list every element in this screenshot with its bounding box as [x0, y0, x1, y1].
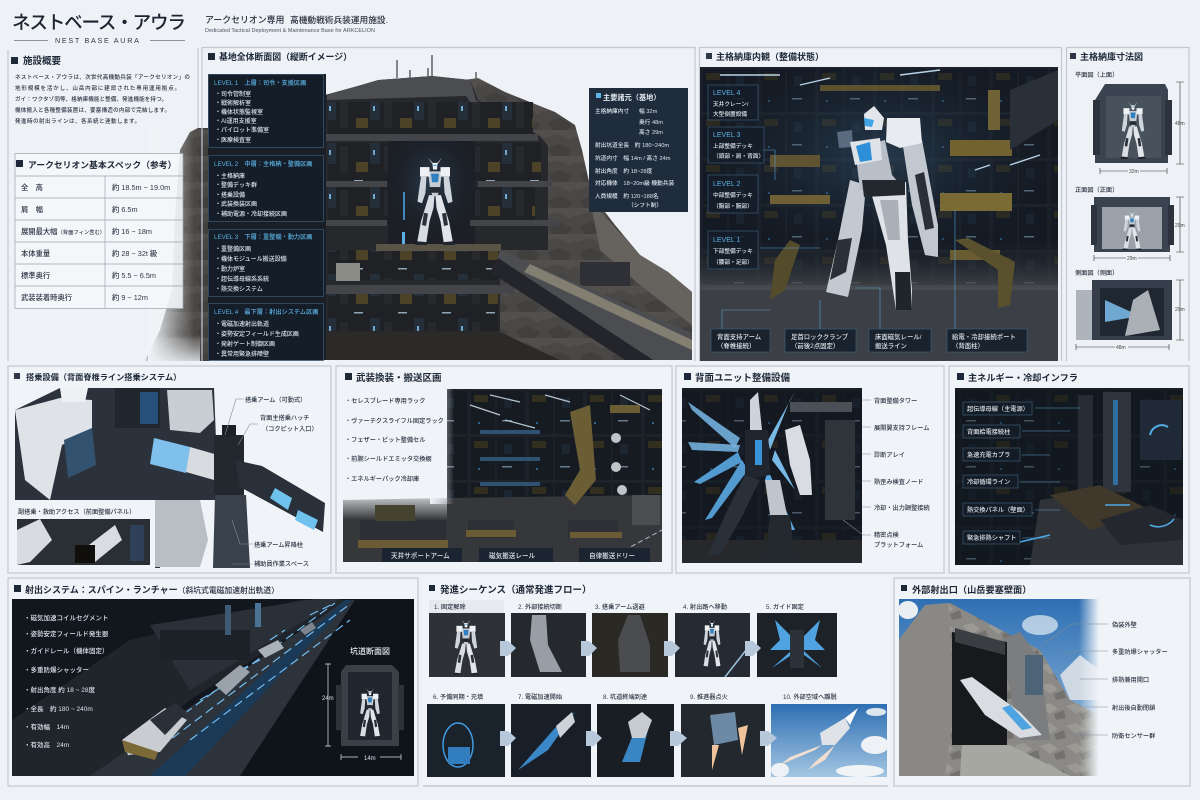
- spec table: 約 6.5m: [112, 205, 138, 214]
- overlay labels: 自律搬送ドリー: [589, 551, 635, 560]
- base specifications box: （シフト制）: [628, 201, 662, 209]
- panel: back unit maintenance: 展開翼支持フレーム: [874, 424, 930, 432]
- panel: armament exchange: ・エネルギーパック冷却庫: [345, 475, 419, 483]
- level 4 panel: ・電磁加速射出軌道: [215, 320, 269, 328]
- step 8: [597, 693, 674, 777]
- subtitle: アークセリオン専用: [205, 14, 284, 25]
- step 10: 10. 外部空域へ離脱: [783, 693, 837, 701]
- panel: launch system: ・有効高 24m: [24, 740, 69, 749]
- bottom callouts: [711, 329, 1027, 352]
- base specifications box: 人員規模 約 120~188名: [595, 192, 659, 200]
- mech in main hangar: [415, 158, 455, 245]
- panel: launch system: ・磁気加速コイルセグメント: [24, 613, 108, 622]
- base specifications box: 幅 32m: [639, 107, 658, 115]
- title block: [12, 12, 186, 45]
- panel: back unit maintenance: 背面ユニット整備設備: [695, 372, 791, 384]
- level 2 panel: ・搭乗設備: [215, 191, 245, 199]
- front view: [1075, 187, 1185, 262]
- panel: back unit maintenance: 熱歪み検査ノード: [874, 478, 924, 486]
- step arrows: [500, 641, 777, 746]
- sub-pilot access inset: [14, 500, 155, 568]
- panel: launch system: [8, 578, 418, 786]
- level 1 panel: ・パイロット準備室: [215, 126, 269, 134]
- title block: ネストベース・アウラ: [12, 12, 186, 33]
- panel: boarding equipment: （コクピット入口）: [262, 425, 318, 433]
- bottom callouts: 背面支持アーム: [717, 332, 762, 341]
- panel: site cross-section: 基地全体断面図（縦断イメージ）: [219, 51, 352, 62]
- panel: back unit maintenance: 背面整備タワー: [874, 397, 917, 405]
- callouts: 背面給電接続柱: [967, 428, 1010, 436]
- level 1 panel: ・機体状態監視室: [215, 108, 263, 116]
- hangar interior image: [700, 67, 1058, 361]
- bottom callouts: （前後2点固定）: [791, 341, 839, 350]
- panel: external launch port: 多重防爆シャッター: [1112, 648, 1168, 656]
- panel: external launch port: 射出後自動閉鎖: [1112, 704, 1156, 712]
- level 3 callout: [708, 127, 764, 163]
- panel: back unit maintenance: [676, 366, 944, 573]
- level 4 panel: ・姿勢安定フィールド生成区画: [215, 330, 299, 338]
- front view: 29m: [1175, 223, 1185, 229]
- level 1 callout: （腰部・足部）: [713, 258, 753, 266]
- base specifications box: 射出坑道全長 約 180~240m: [595, 141, 669, 149]
- level 4 panel: LEVEL 4 最下層：射出システム区画: [214, 308, 318, 316]
- base specifications box: 主要諸元（基地）: [603, 93, 661, 102]
- panel: launch system: ・ガイドレール（機体固定）: [24, 646, 108, 655]
- step 3: [592, 603, 668, 677]
- panel: launch system: ・有効幅 14m: [24, 722, 69, 731]
- overlay labels: [382, 548, 650, 562]
- spec table: 約 28 ~ 32t 級: [112, 249, 158, 258]
- level 3 callout: LEVEL 3: [713, 132, 740, 139]
- panel: boarding equipment: 搭乗アーム昇降柱: [254, 541, 303, 549]
- level 4 panel: ・発射ゲート制御区画: [215, 340, 275, 348]
- front view: 正面図（正面）: [1075, 187, 1118, 194]
- step 5: [757, 603, 837, 677]
- panel: facility overview: ガイ：ワクタゾ同等、格納庫機能と整備、発進機能を持つ。: [15, 95, 167, 103]
- panel: facility overview: [8, 48, 198, 361]
- mech back illustration: [15, 388, 325, 568]
- plan view: 48m: [1175, 121, 1185, 127]
- level 3 panel: ・機体モジュール搬送設備: [215, 255, 287, 263]
- plan view: 平面図（上面）: [1075, 71, 1118, 79]
- callouts: 急速充電カプラ: [967, 451, 1010, 459]
- base specifications box: 主格納庫内寸: [595, 107, 629, 115]
- panel: external launch port: 排熱兼用開口: [1112, 676, 1149, 684]
- base specifications box: 高さ 29m: [639, 128, 663, 136]
- panel: energy and cooling: 主ネルギー・冷却インフラ: [968, 372, 1078, 383]
- level 1 callout: LEVEL 1: [713, 237, 740, 244]
- spec table: 約 16 ~ 18m: [112, 227, 152, 236]
- step 4: [675, 603, 750, 677]
- plan view: [1075, 71, 1185, 175]
- level 1 panel: ・司令管制室: [215, 90, 251, 98]
- level 3 panel: ・熱交換システム: [215, 285, 263, 293]
- panel: external launch port: 偽装外壁: [1112, 621, 1137, 629]
- callouts: [963, 402, 1032, 544]
- level 4 callout: 大型倒置設備: [713, 110, 747, 118]
- side view: 29m: [1175, 307, 1185, 313]
- level 1 panel: ・医療検査室: [215, 136, 251, 144]
- step 1: [429, 600, 505, 677]
- callouts: 緊急排熱シャフト: [967, 534, 1016, 542]
- side view: 48m: [1116, 345, 1126, 351]
- panel: hangar dimensions: [1066, 48, 1189, 361]
- panel: hangar dimensions: 主格納庫寸法図: [1080, 51, 1143, 62]
- side view: 側面図（側面）: [1075, 269, 1118, 277]
- tunnel cross-section inset: 24m: [322, 696, 334, 702]
- base specifications box: 対応機体 18~20m級 機動兵装: [595, 179, 674, 187]
- spec table: 本体重量: [21, 249, 50, 258]
- panel: armament exchange: ・ヴァーテクスライフル固定ラック: [345, 417, 444, 425]
- panel: external launch port: 防衛センサー群: [1112, 732, 1155, 740]
- subtitle: [205, 14, 388, 34]
- panel: armament exchange: ・前腕シールドエミッタ交換棚: [345, 455, 432, 463]
- base specifications box: 坑道内寸 幅 14m / 高さ 24m: [595, 154, 671, 162]
- panel: armament exchange: 武装換装・搬送区画: [356, 372, 442, 384]
- rock fog edge: [145, 128, 210, 361]
- panel: external launch port: [894, 578, 1190, 786]
- level 2 panel: ・補助電源・冷却接続区画: [215, 210, 287, 218]
- panel: armament exchange: ・セレスブレード専用ラック: [345, 397, 425, 405]
- step 3: 3. 搭乗アーム退避: [595, 603, 645, 611]
- panel: launch system: ・射出角度 約 18 ~ 28度: [24, 685, 95, 694]
- panel: hangar interior: [700, 48, 1062, 361]
- level 2 callout: [708, 175, 758, 213]
- bottom callouts: 搬送ライン: [875, 341, 907, 350]
- tunnel cross-section inset: [322, 646, 404, 762]
- level 1 panel: [208, 74, 324, 148]
- level 3 panel: [208, 230, 324, 296]
- spec table: 標準奥行: [21, 271, 50, 280]
- level 2 callout: LEVEL 2: [713, 181, 740, 188]
- cross-section illustration: [208, 55, 692, 360]
- title block: NEST BASE AURA: [55, 36, 141, 45]
- spec table: 約 18.5m ~ 19.0m: [112, 183, 170, 192]
- bottom callouts: 足首ロッククランプ: [791, 332, 849, 341]
- panel: launch system: ・姿勢安定フィールド発生器: [24, 629, 109, 638]
- level 3 panel: ・重整備区画: [215, 245, 251, 253]
- bottom callouts: （脊椎接続）: [717, 341, 755, 350]
- step 8: 8. 坑道終端到達: [603, 693, 647, 701]
- step 7: 7. 電磁加速開始: [518, 693, 563, 701]
- level 1 callout: [708, 231, 758, 269]
- bottom callouts: 給電・冷却接続ポート: [952, 332, 1016, 341]
- panel: back unit maintenance: 冷却・出力調整接続: [874, 504, 930, 512]
- level 4 panel: ・異常用緊急排障壁: [215, 350, 269, 358]
- step 5: 5. ガイド固定: [766, 603, 804, 611]
- panel: facility overview: ネストベース・アウラは、次世代高機動兵装「アークセリオン」の: [15, 73, 190, 81]
- step 2: [511, 603, 586, 677]
- level 2 panel: [208, 156, 324, 222]
- level 1 callout: 下部整備デッキ: [713, 247, 753, 255]
- panel: back unit maintenance: 精密点検: [874, 531, 900, 539]
- infrastructure image: [955, 388, 1183, 565]
- panel: boarding equipment: 搭乗アーム（可動式）: [245, 396, 306, 404]
- panel: facility overview: 地形規模を活かし、山岳内部に建設された専用運用拠点。: [15, 84, 180, 92]
- level 3 panel: ・動力炉室: [215, 265, 245, 273]
- spec table: 肩 幅: [21, 205, 43, 214]
- base specifications box: 奥行 48m: [639, 118, 663, 126]
- bottom callouts: （背面柱）: [952, 341, 984, 350]
- front view: 29m: [1127, 256, 1137, 262]
- panel: boarding equipment: 補助員作業スペース: [254, 560, 309, 568]
- callouts: 熱交換パネル（壁面）: [967, 506, 1029, 514]
- level 3 callout: （頭部・肩・背面）: [713, 152, 764, 160]
- fortress image: [898, 599, 1099, 776]
- base specifications box: [589, 88, 688, 212]
- panel: facility overview: 発進時の射出ラインは、各系統と連動します。: [15, 117, 140, 125]
- step 9: [681, 693, 765, 777]
- winged mech image: [682, 388, 862, 563]
- panel: launch sequence: [422, 577, 890, 786]
- overlay labels: 天井サポートアーム: [391, 551, 450, 560]
- overlay labels: 磁気搬送レール: [489, 551, 536, 560]
- step 7: [511, 693, 591, 777]
- callouts: 冷却循環ライン: [967, 478, 1010, 486]
- subtitle: 高機動戦術兵装運用施設.: [290, 14, 388, 25]
- panel: launch sequence: 発進シーケンス（通常発進フロー）: [440, 584, 592, 596]
- level 1 panel: ・戦術解析室: [215, 99, 251, 107]
- spec table: 全 高: [21, 183, 43, 192]
- panel: facility overview: 機体搬入と各種整備装置は、要塞構造の内部で完結します。: [15, 106, 170, 114]
- level 2 callout: 中部整備デッキ: [713, 191, 753, 199]
- panel: external launch port: 外部射出口（山岳要塞壁面）: [912, 584, 1031, 595]
- level 2 panel: LEVEL 2 中層：主格納・整備区画: [214, 160, 312, 168]
- step 4: 4. 射出路へ移動: [683, 603, 727, 611]
- side view: [1075, 269, 1185, 351]
- panel: boarding equipment: 背面主搭乗ハッチ: [260, 414, 310, 422]
- launch tunnel image: [12, 599, 414, 776]
- spec table: アークセリオン基本スペック（参考）: [28, 159, 176, 170]
- level 3 callout: 上部整備デッキ: [713, 142, 753, 150]
- panel: back unit maintenance: 診断アレイ: [874, 451, 905, 459]
- panel: boarding equipment: 搭乗設備（背面脊椎ライン搭乗システム）: [26, 372, 181, 382]
- callouts: 超伝導母線（主電源）: [967, 405, 1029, 413]
- panel: launch system: ・全長 約 180 ~ 240m: [24, 704, 93, 713]
- level 1 panel: LEVEL 1 上層：司令・支援区画: [214, 79, 306, 87]
- armament hangar image: [343, 389, 662, 562]
- plan view: 32m: [1129, 169, 1139, 175]
- panel: boarding equipment: [8, 366, 331, 573]
- spec table: 約 9 ~ 12m: [112, 293, 148, 302]
- level 4 panel: [208, 304, 324, 360]
- panel: launch system: ・多重防爆シャッター: [24, 665, 89, 674]
- level 2 panel: ・整備デッキ群: [215, 181, 257, 189]
- panel: armament exchange: ・フェザー・ビット整備セル: [345, 436, 425, 444]
- sub-pilot access inset: 副搭乗・救助アクセス（前面整備パネル）: [18, 508, 135, 516]
- step 1: 1. 固定解除: [434, 603, 466, 611]
- step 2: 2. 外部接続切断: [518, 603, 562, 611]
- level 3 panel: ・超伝導母線系系統: [215, 275, 269, 283]
- level 4 callout: [708, 85, 758, 120]
- panel: armament exchange: [336, 366, 672, 573]
- central mech: [826, 106, 938, 310]
- spec table: 約 5.5 ~ 6.5m: [112, 271, 156, 280]
- level 4 callout: LEVEL 4: [713, 90, 740, 97]
- base specifications box: 射出角度 約 18~28度: [595, 167, 653, 175]
- panel: launch system: 射出システム：スパイン・ランチャー（斜坑式電磁加速射出軌道）: [25, 584, 279, 595]
- panel: facility overview: 施設概要: [23, 55, 62, 67]
- spec table: 展開最大幅（背面フィン含む）: [21, 227, 105, 236]
- level 1 panel: ・AI運用支援室: [215, 117, 257, 125]
- level 2 panel: ・武装換装区画: [215, 200, 257, 208]
- step 10: [771, 693, 889, 777]
- step 6: [427, 693, 505, 777]
- level 4 callout: 天井クレーン/: [713, 100, 749, 108]
- bottom callouts: 床面磁気レール/: [875, 332, 922, 341]
- spec table: 武装装着時奥行: [21, 293, 72, 302]
- tunnel cross-section inset: 坑道断面図: [350, 646, 390, 656]
- spec table: [15, 154, 183, 308]
- step 9: 9. 推進器点火: [690, 693, 728, 701]
- level 3 panel: LEVEL 3 下層：重整備・動力区画: [214, 233, 312, 241]
- level 2 callout: （胸部・腕部）: [713, 202, 753, 210]
- panel: energy and cooling: [949, 366, 1189, 573]
- step 6: 6. 予備同期・充填: [433, 693, 484, 701]
- level 2 panel: ・主格納庫: [215, 172, 245, 180]
- subtitle: Dedicated Tactical Deployment & Maintenance Base for ARKCELION: [205, 28, 375, 34]
- tunnel cross-section inset: 14m: [364, 756, 376, 762]
- panel: site cross-section: [202, 48, 695, 361]
- panel: hangar interior: 主格納庫内観（整備状態）: [716, 51, 824, 62]
- panel: back unit maintenance: プラットフォーム: [874, 542, 923, 549]
